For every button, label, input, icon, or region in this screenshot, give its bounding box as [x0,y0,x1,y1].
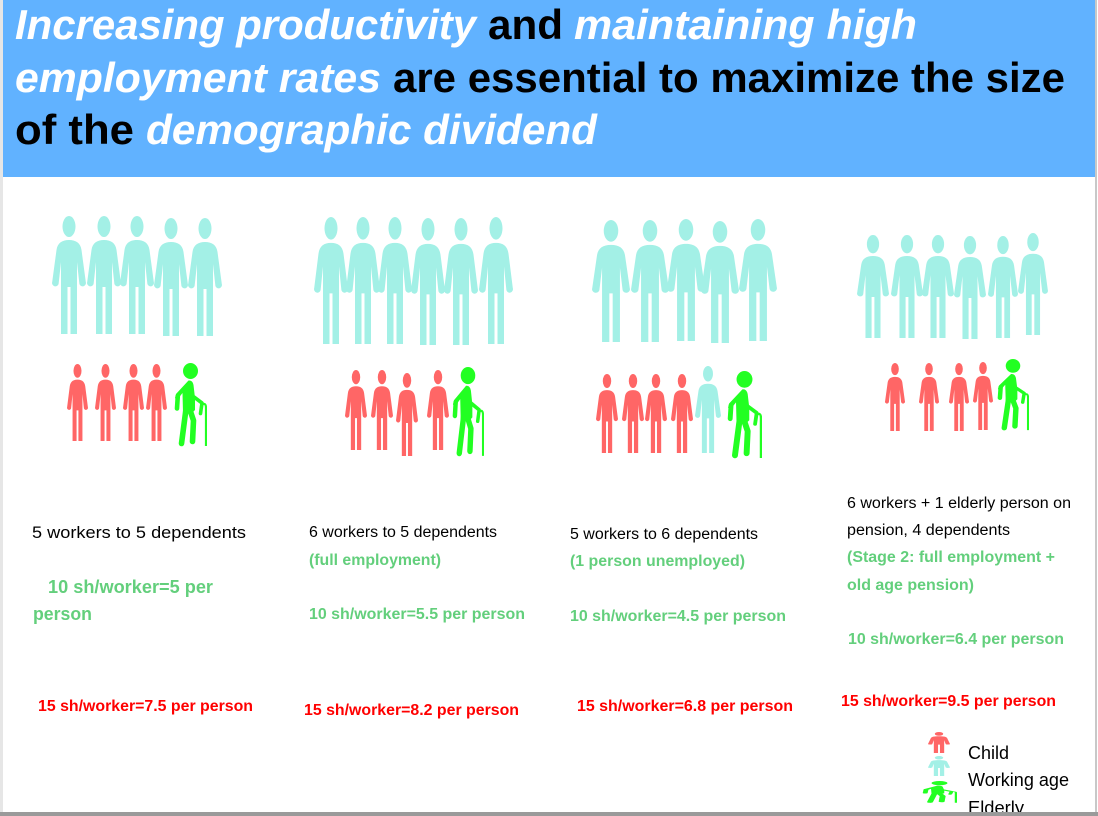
income at 15 sh: 15 sh/worker=6.8 per person [577,698,793,715]
title line 1: and [488,1,563,48]
title line 2: employment rates [15,54,381,101]
title line 3: of the [15,106,134,153]
income at 10 sh: 10 sh/worker=4.5 per person [570,608,786,625]
income at 15 sh: 15 sh/worker=9.5 per person [841,693,1056,710]
title line 3: demographic dividend [146,106,598,153]
ratio text: 5 workers to 5 dependents [32,524,246,542]
icons: five working-age people [592,219,777,343]
legend label: child: Child [968,743,1009,763]
income at 10 sh: person [33,604,92,624]
icons: four children, one unemployed worker and one elderly person [596,366,761,458]
panel: 6 workers plus pensioner [841,233,1071,710]
status note: (full employment) [309,552,441,569]
panel: 5 workers to 6 dependents [570,219,793,715]
legend label: working age: Working age [968,770,1069,790]
icons: four children and one elderly person [885,359,1028,431]
income at 10 sh: 10 sh/worker=6.4 per person [848,631,1064,648]
ratio text: 6 workers to 5 dependents [309,524,497,541]
icons: six working-age people [314,217,513,345]
icon: elderly [923,781,956,803]
ratio text: 6 workers + 1 elderly person on [847,495,1071,512]
income at 10 sh: 10 sh/worker=5.5 per person [309,606,525,623]
ratio text: 5 workers to 6 dependents [570,526,758,543]
title line 1: Increasing productivity [15,1,479,48]
status note: old age pension) [847,577,974,594]
icons: six working-age people [857,233,1048,339]
icons: four children and one elderly person [345,367,483,456]
icons: five working-age people [52,216,222,336]
panel: 5 workers to 5 dependents [32,216,253,715]
income at 15 sh: 15 sh/worker=7.5 per person [38,698,253,715]
title banner [3,0,1095,177]
income at 15 sh: 15 sh/worker=8.2 per person [304,702,519,719]
legend [923,732,1069,816]
status note: (Stage 2: full employment + [847,549,1055,566]
panel: 6 workers to 5 dependents [304,217,525,719]
income at 10 sh: 10 sh/worker=5 per [48,577,213,597]
status note: (1 person unemployed) [570,553,745,570]
title line 2: are essential to maximize the size [393,54,1065,101]
icon: child [928,732,950,753]
icons: four children and one elderly person [67,363,206,446]
title line 1: maintaining high [574,1,917,48]
ratio text: pension, 4 dependents [847,522,1010,539]
icon: working age [928,756,950,776]
